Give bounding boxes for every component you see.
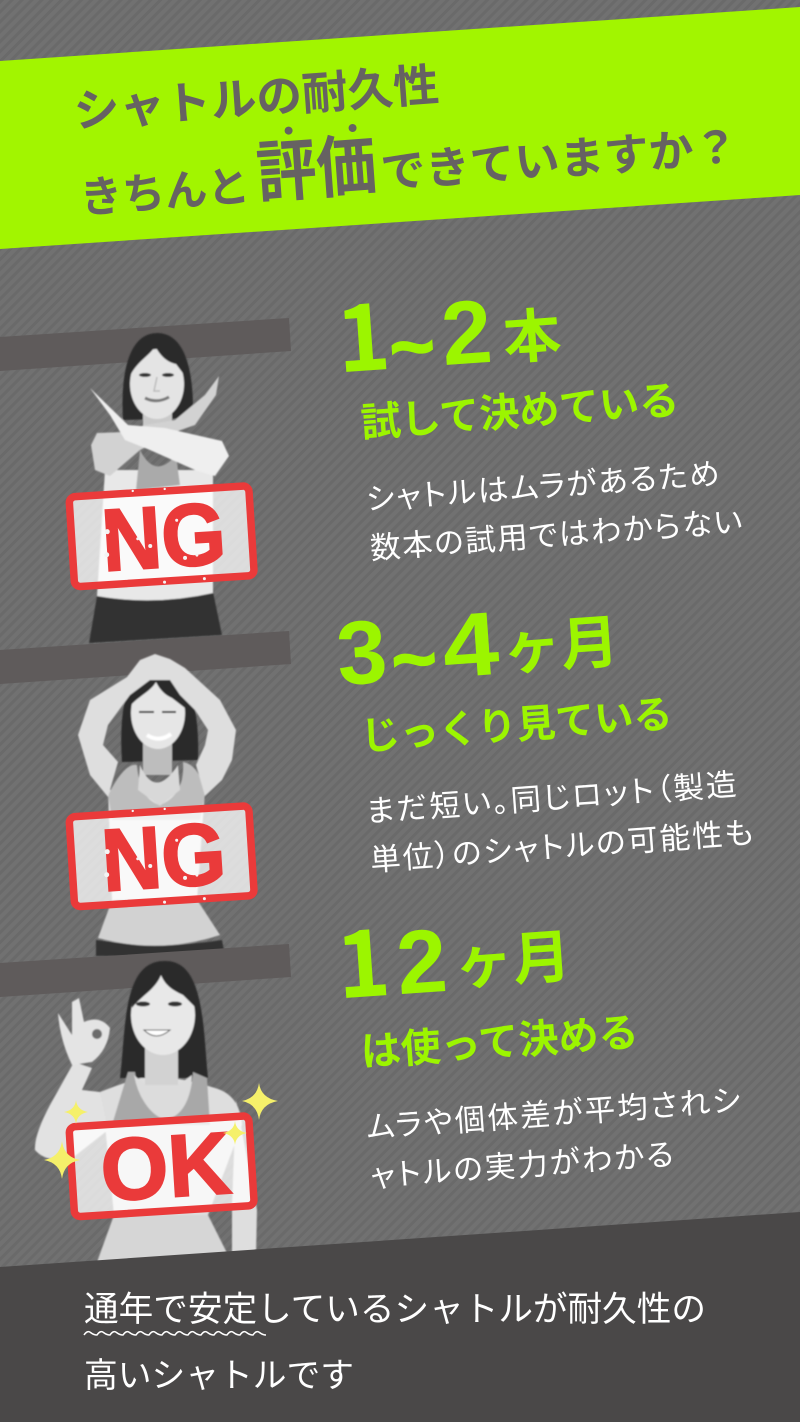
title line 2: できていますか？	[378, 111, 740, 201]
section 2 text: ヶ月	[500, 595, 621, 686]
section 3 text	[332, 878, 742, 1196]
footer line 1: 通年で安定しているシャトルが耐久性の	[84, 1281, 706, 1331]
section 1 text: 本	[500, 288, 564, 376]
woman 2: hands over head	[78, 654, 236, 956]
stamp: OK: OK	[98, 1113, 234, 1220]
section 3 body: ムラや個体差が平均されシ	[364, 1076, 742, 1147]
section 1 text: 2	[438, 282, 495, 385]
section 2 body	[364, 760, 755, 880]
section 2 text: ~	[388, 613, 440, 704]
sparkles	[44, 1083, 278, 1179]
section 1 text	[332, 253, 744, 568]
section 2 text: 3	[333, 602, 390, 705]
section 1 subheading: 試して決めている	[359, 368, 681, 449]
title line 1: シャトルの耐久性	[71, 48, 441, 140]
stamp: NG 2: NG	[99, 803, 229, 910]
section 3 text: 2	[393, 911, 450, 1014]
section 1 body: シャトルはムラがあるため	[364, 449, 721, 519]
section 1 body	[364, 449, 744, 568]
footer panel	[0, 1212, 800, 1422]
section 2 text: 4	[439, 594, 502, 698]
band 1	[0, 318, 291, 371]
section 1 text: ~	[386, 301, 438, 392]
section 3 subheading: は使って決める	[359, 1000, 640, 1078]
title line 2: きちんと	[77, 152, 252, 226]
section 3 text: ヶ月	[452, 909, 573, 1001]
title line 2: 評価	[253, 111, 380, 217]
section 1 body: 数本の試用ではわからない	[368, 497, 744, 568]
wavy underline	[84, 1332, 266, 1335]
band 2	[0, 631, 291, 684]
title line 2	[75, 85, 741, 230]
woman 3: OK sign	[35, 961, 257, 1262]
section 2 body: 単位）のシャトルの可能性も	[368, 808, 755, 880]
section 2 text	[333, 586, 755, 880]
section 3 body	[364, 1076, 742, 1196]
band 3	[0, 944, 291, 997]
section 1 text: 1	[332, 265, 394, 398]
title banner	[0, 7, 800, 249]
section 2 body: まだ短い。同じロット（製造	[364, 760, 738, 831]
section 2 subheading: じっくり見ている	[359, 683, 674, 762]
stamp: NG 1: NG	[99, 483, 229, 590]
woman 1: arms crossed	[89, 333, 229, 643]
footer line 2: 高いシャトルです	[84, 1348, 354, 1397]
section 3 body: ャトルの実力がわかる	[368, 1130, 675, 1196]
section 3 text: 1	[332, 891, 394, 1024]
